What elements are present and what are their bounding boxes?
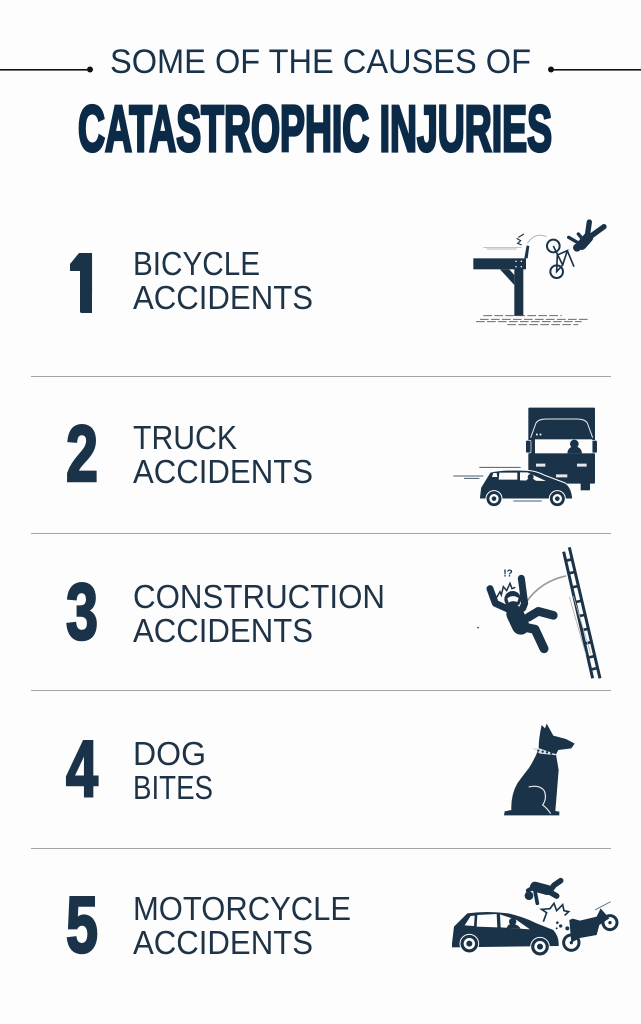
number 1 xyxy=(64,239,102,328)
label: motorcycle accidents: MOTORCYCLE xyxy=(133,890,351,927)
panel: dog bites xyxy=(66,724,575,815)
number 4: 4 xyxy=(66,724,98,813)
icon: cyclist thrown off a bridge xyxy=(473,222,604,325)
divider 2 xyxy=(31,533,611,534)
label: dog bites: DOG xyxy=(133,735,206,772)
panel: bicycle accidents xyxy=(64,222,604,328)
number 2: 2 xyxy=(66,409,98,498)
number 1: 1 xyxy=(75,239,99,328)
subtitle: SOME OF THE CAUSES OF xyxy=(110,43,531,81)
label: truck accidents: ACCIDENTS xyxy=(133,453,313,490)
panel: construction accidents xyxy=(66,547,600,678)
icon: sitting dog xyxy=(504,724,575,815)
number 5: 5 xyxy=(66,880,98,969)
icon: car hitting motorcycle xyxy=(452,881,617,956)
divider 1 xyxy=(31,376,611,377)
left heading rule with dot xyxy=(0,66,93,72)
icon: worker falling from ladder: !? xyxy=(503,569,513,580)
icon: worker falling from ladder xyxy=(477,547,600,678)
right heading rule with dot xyxy=(548,66,641,72)
divider 4 xyxy=(31,848,611,849)
number 3: 3 xyxy=(66,567,98,656)
label: truck accidents: TRUCK xyxy=(133,419,237,456)
label: dog bites: BITES xyxy=(133,769,213,806)
icon: car and truck xyxy=(453,408,597,507)
panel: motorcycle accidents xyxy=(66,880,617,969)
divider 3 xyxy=(31,690,611,691)
header xyxy=(0,43,641,165)
label: construction accidents: CONSTRUCTION xyxy=(133,578,385,615)
label: motorcycle accidents: ACCIDENTS xyxy=(133,924,313,961)
label: bicycle accidents: ACCIDENTS xyxy=(133,279,313,316)
label: construction accidents: ACCIDENTS xyxy=(133,612,313,649)
label: bicycle accidents: BICYCLE xyxy=(133,245,260,282)
panel: truck accidents xyxy=(66,408,597,507)
